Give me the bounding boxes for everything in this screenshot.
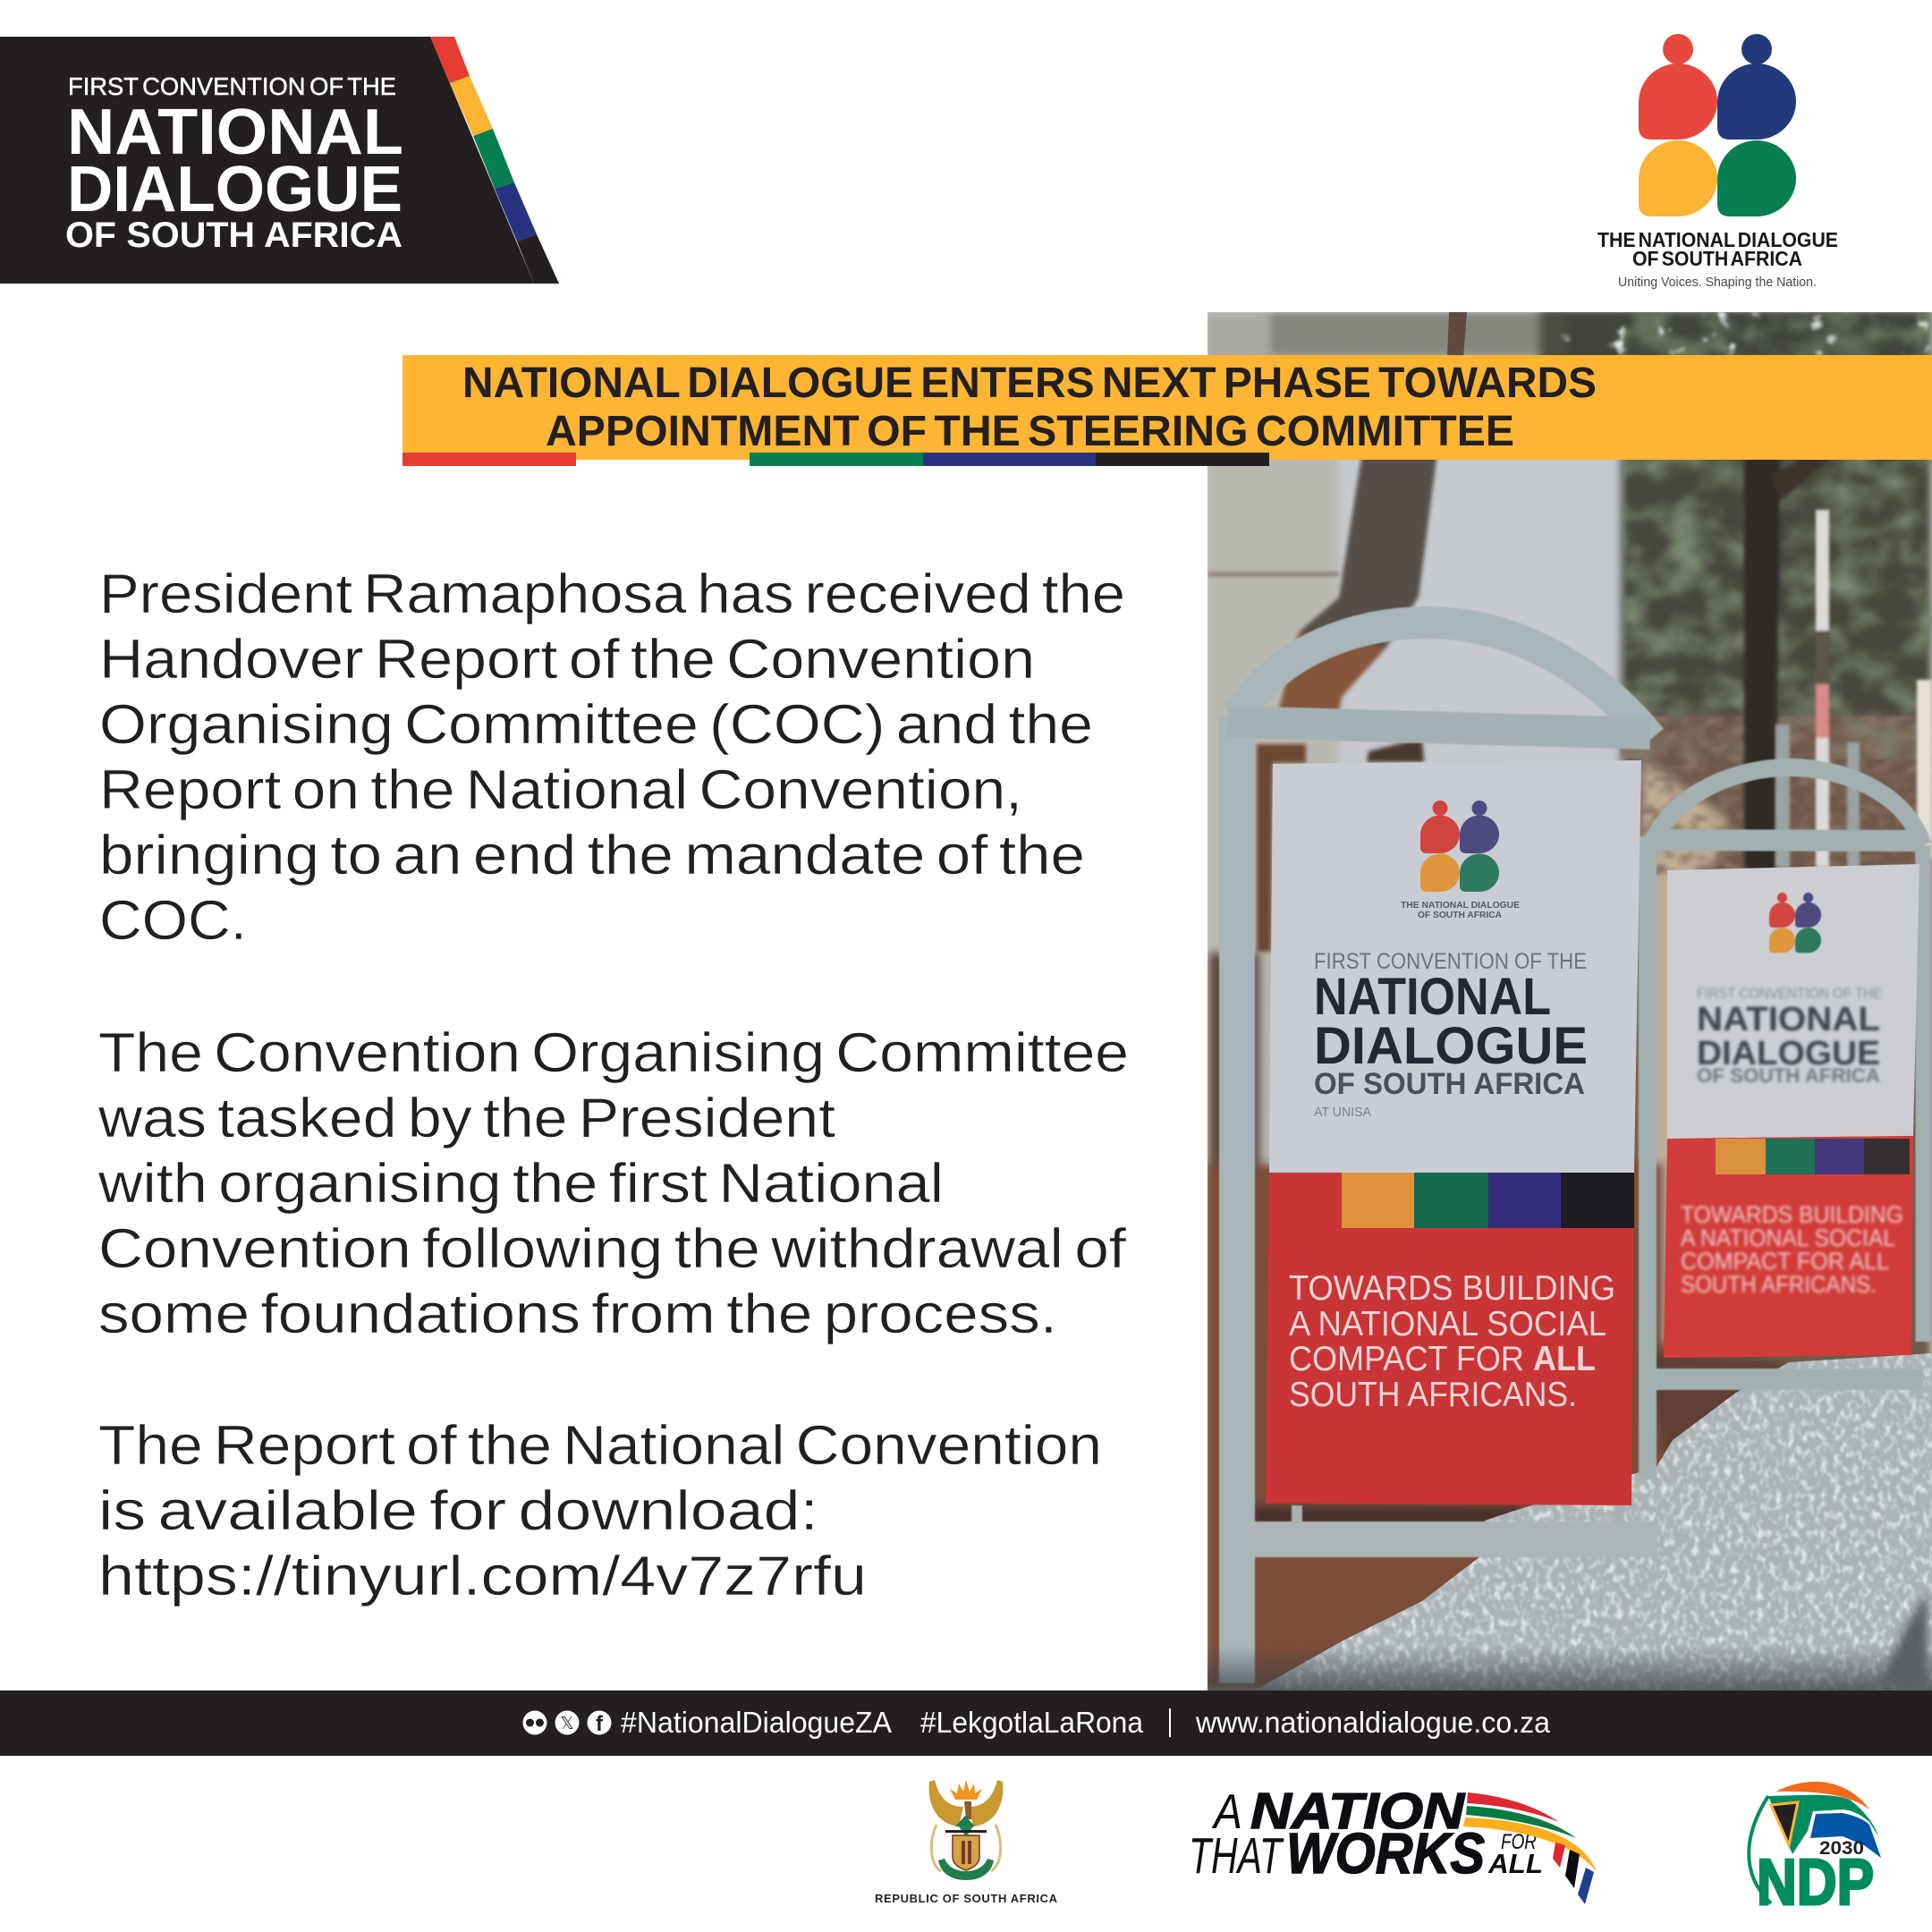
logo: South African coat of arms [875,1780,1058,1905]
social icons [522,1710,612,1736]
body text: paragraph two: with organising the first National [97,1153,944,1215]
logo: A Nation That Works For All [1189,1783,1597,1904]
body text: paragraph one: Organising Committee (COC) and the [99,694,1093,756]
logo: The National Dialogue of South Africa: Uniting Voices. Shaping the Nation. [1618,275,1817,290]
body text: paragraph two: Convention following the withdrawal of [98,1218,1127,1280]
body text: paragraph three with link: The Report of the National Convention [98,1415,1102,1477]
headline banner: APPOINTMENT OF THE STEERING COMMITTEE [546,408,1514,455]
headline banner [402,355,1932,466]
header badge: First Convention of the National Dialogue: NATIONAL [67,97,403,168]
logo: The National Dialogue of South Africa [1597,34,1838,290]
social icons: 𝕏 [560,1715,574,1733]
body text: paragraph one [99,564,1125,952]
header badge: First Convention of the National Dialogue: FIRST CONVENTION OF THE [68,72,396,100]
front sign panel [1266,760,1641,1505]
body text: paragraph one: Report on the National Convention, [99,759,1022,821]
footer bar [0,1690,1932,1756]
logo: A Nation That Works For All: THAT [1189,1827,1284,1885]
footer bar: #NationalDialogueZA [621,1706,892,1739]
rear sign panel: COMPACT FOR ALL [1681,1248,1889,1275]
rear sign panel: FIRST CONVENTION OF THE [1697,985,1882,1002]
footer bar: www.nationaldialogue.co.za [1195,1706,1551,1739]
rear sign panel: DIALOGUE [1697,1035,1880,1072]
front sign panel: OF SOUTH AFRICA [1418,911,1502,920]
body text: paragraph one: COC. [99,890,247,952]
headline banner: NATIONAL DIALOGUE ENTERS NEXT PHASE TOWARDS [462,360,1597,407]
tree trunk and wall details [1208,438,1844,952]
logo: NDP 2030 [1749,1782,1881,1919]
footer bar: #LekgotlaLaRona [920,1706,1144,1739]
rear sign panel [1664,864,1919,1358]
frame: rear sign [1648,767,1923,1479]
body text: paragraph one: bringing to an end the mandate of the [99,825,1085,886]
front sign panel: COMPACT FOR ALL [1289,1340,1596,1378]
front sign panel: AT UNISA [1314,1105,1371,1120]
header badge: First Convention of the National Dialogue [0,37,559,284]
rear sign panel: A NATIONAL SOCIAL [1681,1224,1895,1251]
body text: paragraph three with link: https://tinyurl.com/4v7z7rfu [98,1546,867,1607]
social icons: f [596,1712,604,1736]
logo: A Nation That Works For All: A [1211,1784,1242,1839]
logo: The National Dialogue of South Africa: OF SOUTH AFRICA [1632,247,1802,270]
rear sign panel: TOWARDS BUILDING [1681,1201,1903,1228]
photo: convention signboards [1203,309,1932,1690]
frame: front sign [1227,623,1657,1683]
body text: paragraph one: President Ramaphosa has received the [99,564,1125,625]
white flagpole and lamp [1775,510,1932,868]
front sign panel: TOWARDS BUILDING [1289,1269,1615,1308]
body text: paragraph two: some foundations from the process. [98,1284,1057,1345]
body text: paragraph two: was tasked by the President [97,1088,835,1149]
front sign panel: A NATIONAL SOCIAL [1289,1305,1606,1343]
front sign panel: NATIONAL [1314,968,1551,1026]
front sign panel: DIALOGUE [1314,1017,1588,1075]
front sign panel: FIRST CONVENTION OF THE [1314,949,1587,974]
body text: paragraph three with link [98,1415,1102,1607]
front sign panel: OF SOUTH AFRICA [1314,1067,1585,1101]
header badge: First Convention of the National Dialogue: DIALOGUE [67,154,402,225]
body text: paragraph two [97,1022,1129,1345]
body text: paragraph three with link: is available for download: [98,1480,818,1542]
body text: paragraph two: The Convention Organising Committee [98,1022,1129,1084]
logo: A Nation That Works For All: FOR [1501,1830,1537,1854]
logo: The National Dialogue of South Africa: THE NATIONAL DIALOGUE [1597,228,1838,251]
logo: A Nation That Works For All: NATION [1250,1783,1466,1840]
logo: A Nation That Works For All: WORKS [1286,1821,1485,1885]
gravel ground [1208,1342,1932,1690]
rear sign panel: SOUTH AFRICANS. [1681,1271,1877,1298]
logo: NDP 2030: NDP [1757,1847,1874,1919]
rear sign panel: OF SOUTH AFRICA [1697,1064,1880,1087]
logo: South African coat of arms: REPUBLIC OF SOUTH AFRICA [875,1892,1058,1905]
rear sign panel: NATIONAL [1697,1001,1880,1038]
header badge: First Convention of the National Dialogue: OF SOUTH AFRICA [65,216,402,255]
front sign panel: SOUTH AFRICANS. [1289,1376,1577,1414]
logo: NDP 2030: 2030 [1819,1838,1864,1859]
foliage and leaf-litter texture [1270,312,1932,877]
front sign panel: THE NATIONAL DIALOGUE [1401,901,1520,911]
logo: A Nation That Works For All: ALL [1487,1848,1543,1879]
body text: paragraph one: Handover Report of the Convention [99,629,1035,691]
